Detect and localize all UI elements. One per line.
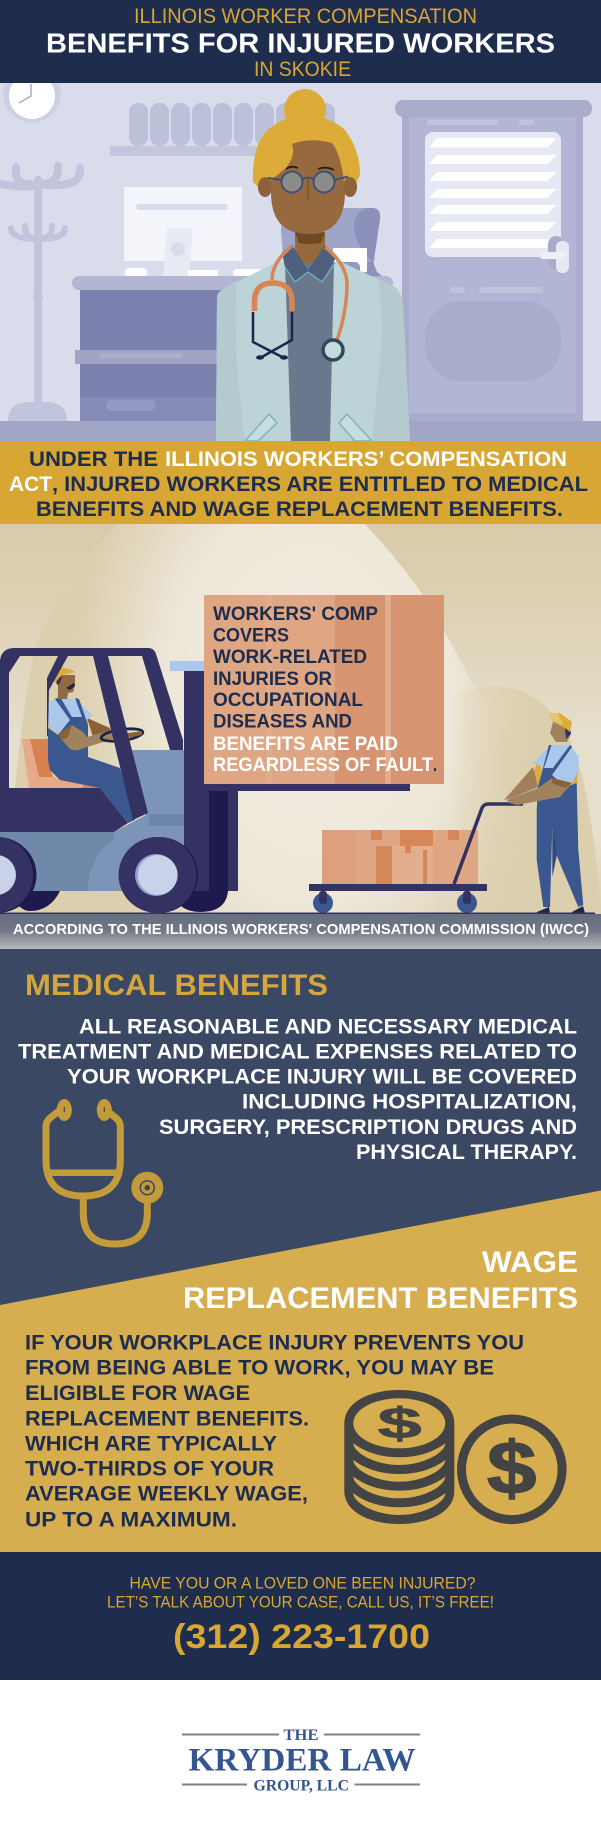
callout text: . <box>433 755 437 776</box>
doctor: eyebrows <box>286 167 334 170</box>
forklift: dark body <box>0 788 128 832</box>
panel: header <box>0 0 601 83</box>
driver: gold shirt edge <box>48 708 88 742</box>
forklift: front wheel <box>118 837 198 913</box>
doctor: hair bun <box>284 89 326 131</box>
wage benefits text: TWO-THIRDS OF YOUR <box>25 1458 274 1480</box>
worker: sleeve shadow <box>552 778 572 788</box>
worker: gold undershirt <box>534 758 578 790</box>
panel: forklift warehouse scene <box>0 524 601 914</box>
driver: neck and head <box>58 675 75 699</box>
worker: head <box>550 722 570 742</box>
worker: far arm <box>504 767 538 800</box>
wage benefits text: UP TO A MAXIMUM. <box>25 1508 237 1532</box>
worker: inner leg shadow <box>552 827 557 877</box>
call to action text: LET’S TALK ABOUT YOUR CASE, CALL US, IT’S FREE! <box>107 1594 494 1612</box>
logo: The Kryder Law Group: THE <box>284 1727 318 1744</box>
doctor: collar trim <box>285 263 335 282</box>
forklift: lower body <box>0 832 114 891</box>
worker: shoes <box>537 906 585 913</box>
worker: hair <box>565 726 571 739</box>
doctor: right ear <box>343 177 357 197</box>
fork platform <box>209 784 410 791</box>
statement text: BENEFITS AND WAGE REPLACEMENT BENEFITS. <box>36 498 563 521</box>
forklift <box>0 648 238 913</box>
heading: medical benefits: MEDICAL BENEFITS <box>25 969 328 1002</box>
doctor: left ear <box>258 177 272 197</box>
statement text: ILLINOIS WORKERS’ COMPENSATION <box>165 448 567 471</box>
doctor: coat side panels <box>216 280 410 441</box>
forklift: rear wheel <box>0 837 36 913</box>
doctor: hair <box>253 116 360 190</box>
heading: wage replacement benefits: REPLACEMENT BENEFITS <box>183 1282 578 1315</box>
shelf with binders <box>110 103 335 156</box>
medical benefits text: ALL REASONABLE AND NECESSARY MEDICAL <box>79 1016 577 1038</box>
wage benefits text: ELIGIBLE FOR WAGE <box>25 1382 250 1405</box>
doctor: glasses <box>268 172 348 192</box>
doctor: pockets <box>245 414 372 441</box>
background arch <box>8 524 530 914</box>
driver: sleeve shadow <box>58 725 72 740</box>
ground line <box>0 912 595 914</box>
phone number: (312) 223-1700 <box>173 1618 430 1656</box>
call to action text: HAVE YOU OR A LOVED ONE BEEN INJURED? <box>130 1574 476 1592</box>
icon: coin stack: $ <box>378 1399 422 1448</box>
panel: wage replacement benefits <box>0 1190 601 1552</box>
forklift: driver <box>46 667 135 823</box>
statement text: UNDER THE <box>29 448 158 471</box>
source band <box>0 914 601 949</box>
doctor: neck shadow <box>295 232 325 244</box>
worker: near arm <box>507 778 572 805</box>
forklift: body trim <box>149 814 184 826</box>
statement text: ACT <box>9 473 52 496</box>
medical benefits text: PHYSICAL THERAPY. <box>356 1141 577 1164</box>
panel: call to action <box>0 1552 601 1680</box>
worker: helmet <box>549 713 572 732</box>
title: BENEFITS FOR INJURED WORKERS <box>46 28 555 58</box>
callout text: OCCUPATIONAL <box>213 690 363 711</box>
stethoscope <box>253 246 347 360</box>
logo: The Kryder Law Group <box>0 1680 601 1836</box>
forklift: seat back <box>30 739 53 777</box>
driver: mustache <box>66 683 75 690</box>
callout text: COVERS <box>213 626 289 646</box>
callout text: INJURIES OR <box>213 669 332 690</box>
callout text: DISEASES AND <box>213 712 352 732</box>
medical benefits text: YOUR WORKPLACE INJURY WILL BE COVERED <box>67 1066 577 1088</box>
desk <box>72 276 393 421</box>
worker: overalls <box>537 745 583 907</box>
wage benefits text: REPLACEMENT BENEFITS. <box>25 1408 309 1430</box>
forklift: seat <box>22 739 100 788</box>
floor <box>0 421 601 441</box>
callout text: WORK-RELATED <box>213 647 367 668</box>
icon: dollar coin: $ <box>487 1427 536 1510</box>
monitor <box>124 187 263 277</box>
driver: overalls <box>48 697 135 823</box>
icon: dollar coin <box>462 1419 562 1520</box>
statement text <box>9 448 588 521</box>
doctor figure <box>216 89 410 441</box>
forklift: rear dark wheel arcs <box>10 891 228 912</box>
medical benefits text <box>18 1016 577 1164</box>
wage benefits text <box>25 1332 524 1532</box>
panel: gold statement band <box>0 441 601 524</box>
medical benefits text: TREATMENT AND MEDICAL EXPENSES RELATED TO <box>18 1040 577 1064</box>
hand cart with boxes <box>309 804 523 913</box>
forklift: steering wheel <box>100 727 144 743</box>
background hill <box>445 686 600 914</box>
callout: cardboard box with text <box>204 595 444 784</box>
medical benefits text: INCLUDING HOSPITALIZATION, <box>242 1090 577 1114</box>
forklift: upper light body <box>132 750 184 826</box>
callout text <box>213 604 437 776</box>
driver: arm <box>60 725 113 750</box>
coat rack <box>0 166 80 421</box>
heading: kicker: ILLINOIS WORKER COMPENSATION <box>134 5 477 28</box>
heading: wage replacement benefits <box>183 1246 578 1315</box>
forklift: cab frame <box>0 648 183 820</box>
driver: hair <box>55 677 62 685</box>
wage benefits text: AVERAGE WEEKLY WAGE, <box>25 1482 308 1506</box>
driver: far arm <box>87 718 112 738</box>
doctor: collar <box>282 245 337 282</box>
callout text: REGARDLESS OF FAULT <box>213 755 433 776</box>
worker: helmet brim <box>549 713 563 725</box>
worker pushing cart <box>504 713 585 913</box>
forklift: mast <box>170 661 238 891</box>
doctor: lab coat <box>216 260 410 441</box>
logo: The Kryder Law Group: KRYDER LAW <box>188 1742 416 1778</box>
icon: stethoscope <box>46 1099 163 1244</box>
panel: doctor's office illustration <box>0 83 601 441</box>
forklift: seat edge <box>83 785 100 788</box>
callout text: BENEFITS ARE PAID <box>213 734 398 755</box>
doctor: pupils <box>290 177 325 185</box>
medical benefits text: SURGERY, PRESCRIPTION DRUGS AND <box>159 1116 577 1139</box>
forklift: driver's hand <box>113 730 142 739</box>
wage benefits text: WHICH ARE TYPICALLY <box>25 1432 277 1456</box>
driver: helmet <box>53 667 75 683</box>
source text: ACCORDING TO THE ILLINOIS WORKERS' COMPENSATION COMMISSION (IWCC) <box>13 921 589 938</box>
logo: The Kryder Law Group: GROUP, LLC <box>254 1778 349 1794</box>
icon: coin stack <box>344 1390 454 1524</box>
statement text: , INJURED WORKERS ARE ENTITLED TO MEDICAL <box>52 473 588 496</box>
call to action text <box>107 1574 494 1612</box>
doctor: neck <box>295 232 325 272</box>
callout text: WORKERS' COMP <box>213 604 378 625</box>
wage benefits text: IF YOUR WORKPLACE INJURY PREVENTS YOU <box>25 1332 524 1354</box>
icon: wall clock <box>3 83 61 123</box>
forklift: cab post <box>47 656 68 737</box>
doctor: nose <box>307 178 309 200</box>
door <box>395 100 592 421</box>
heading: location: IN SKOKIE <box>254 58 351 81</box>
heading: wage replacement benefits: WAGE <box>482 1246 578 1279</box>
driver: shirt <box>46 697 92 735</box>
doctor: shirt <box>285 263 334 441</box>
wage benefits text: FROM BEING ABLE TO WORK, YOU MAY BE <box>25 1356 494 1380</box>
worker: shirt <box>533 745 579 783</box>
office chair <box>281 208 382 276</box>
forklift: lower light body <box>88 814 184 891</box>
panel: medical benefits <box>0 949 601 1309</box>
doctor: face <box>271 140 345 234</box>
